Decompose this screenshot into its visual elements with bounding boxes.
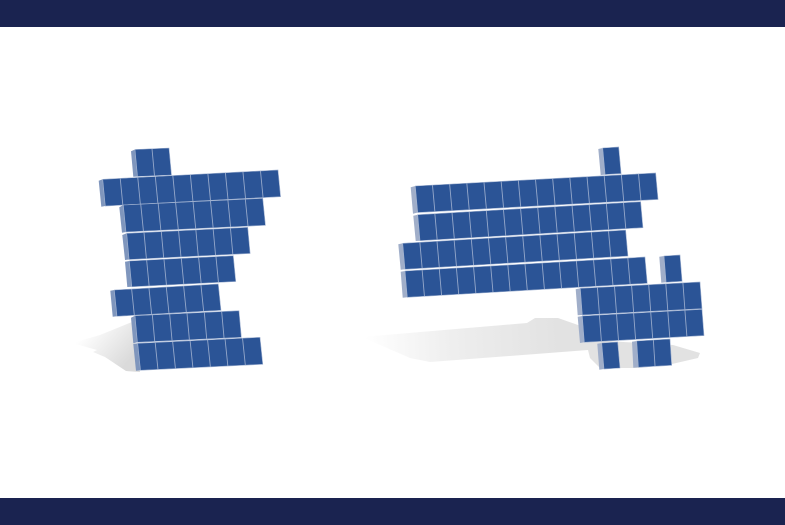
panel row R2 xyxy=(413,202,643,241)
panel row R1 xyxy=(411,173,658,214)
panel row R6 xyxy=(576,282,702,315)
panel pair R9 xyxy=(632,339,672,368)
panel row R4 xyxy=(401,257,647,298)
panel row L4 xyxy=(125,256,236,287)
panel row L1 xyxy=(99,170,281,207)
panel row L7 xyxy=(133,337,263,371)
panel row L2 xyxy=(119,198,265,233)
solar array: right xyxy=(398,147,704,370)
shadow: right array xyxy=(362,318,700,368)
panel row L3 xyxy=(122,227,250,260)
panel row L0 xyxy=(131,148,172,177)
panel single R8 xyxy=(597,342,620,370)
panel row L6 xyxy=(131,311,241,343)
panel row R3 xyxy=(398,230,628,270)
panel row R0 xyxy=(598,147,621,175)
bottom band xyxy=(0,498,785,525)
panel row L5 xyxy=(110,284,221,317)
solar array: left xyxy=(99,148,281,371)
shadow: left array xyxy=(72,322,140,372)
panel row R7 xyxy=(578,309,704,343)
panel single R5 xyxy=(659,255,682,283)
top band xyxy=(0,0,785,27)
